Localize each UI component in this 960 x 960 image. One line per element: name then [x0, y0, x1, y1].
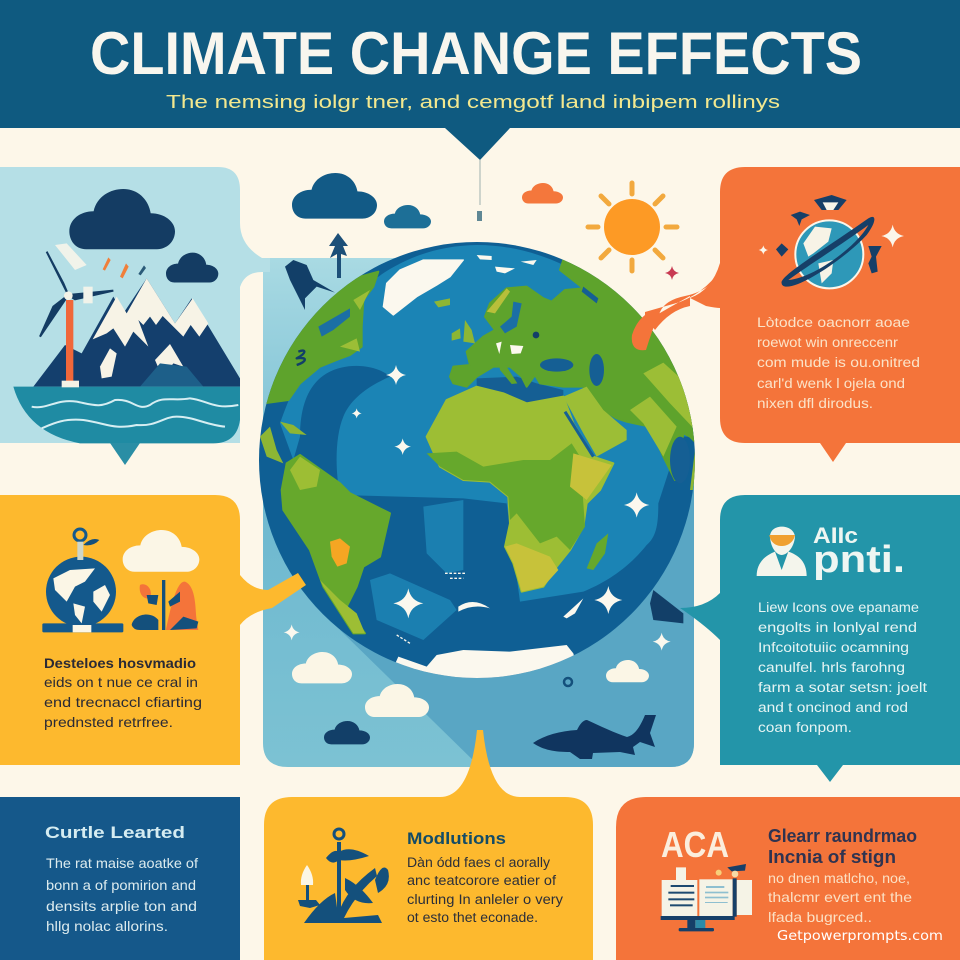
- panel: teal: [680, 495, 960, 782]
- text block: [46, 855, 198, 934]
- mountains: [33, 278, 240, 387]
- text block: engolts in lonlyal rend: [758, 620, 917, 635]
- text block: lfada bugrced..: [768, 909, 872, 925]
- sky stars: [284, 624, 671, 651]
- central sky panel: [263, 258, 694, 767]
- lighter ocean: [280, 245, 697, 602]
- watermark: Getpowerprompts.com: [777, 929, 943, 944]
- cloud: white center: [365, 684, 429, 717]
- heading: Curtle Learted: [45, 823, 185, 842]
- cloud: orange: [522, 183, 563, 204]
- panel: orange bottom: [616, 797, 960, 960]
- text block: farm a sotar setsn: joelt: [758, 680, 927, 695]
- text block: coan fonpom.: [758, 720, 852, 735]
- Greenland: [383, 260, 463, 315]
- text block: Dàn ódd faes cl aorally: [407, 855, 550, 870]
- text block: ot esto thet econade.: [407, 910, 538, 925]
- icon: plant and candle: [298, 829, 389, 923]
- globe stars: [352, 365, 649, 643]
- ocean base: [250, 237, 710, 683]
- text block: com mude is ou.onitred: [757, 355, 920, 370]
- text block: end trecnaccl cfiarting: [44, 694, 202, 710]
- heading: Incnia of stign: [768, 847, 896, 867]
- silhouette on globe edge: [285, 260, 335, 310]
- title: CLIMATE CHANGE EFFECTS: [90, 20, 862, 87]
- Mediterranean: [477, 377, 563, 403]
- header pointer thread: [477, 160, 482, 221]
- icon: sun: [588, 183, 677, 271]
- icon: globe on stand and plant: [42, 529, 199, 632]
- text block: roewot win onreccenr: [757, 335, 899, 350]
- text block: prednsted retrfree.: [44, 714, 173, 730]
- text block: [407, 855, 563, 925]
- icon caption: AIIc: [813, 523, 858, 548]
- text block: clurting In anleler o very: [407, 892, 563, 907]
- icon: earth with orbit ring: [759, 195, 904, 288]
- text block: eids on t nue ce cral in: [44, 674, 198, 690]
- icon: whale: [533, 715, 656, 759]
- text block: Desteloes hosvmadio: [44, 655, 196, 671]
- text block: hllg nolac allorins.: [46, 918, 168, 934]
- text block: no dnen matlcho, noe,: [768, 870, 910, 886]
- subtitle: The nemsing iolgr tner, and cemgotf land inbipem rollinys: [166, 92, 780, 112]
- header band: [0, 0, 960, 160]
- icon: red diamond: [665, 266, 679, 280]
- Arabia: [563, 387, 627, 457]
- icon: monitor with open book: [661, 864, 752, 931]
- continents: [803, 227, 833, 283]
- icon caption large: pnti.: [813, 539, 905, 581]
- falling debris: [55, 243, 146, 278]
- wind turbine: [40, 252, 113, 387]
- cloud: white left: [292, 652, 352, 683]
- South America: [282, 455, 390, 633]
- heading: Modlutions: [407, 830, 506, 848]
- text block: bonn a of pomirion and: [46, 877, 196, 893]
- text block: Infcoitotuiic ocamning: [758, 640, 909, 655]
- cloud: dark large: [69, 189, 175, 249]
- orbit: [781, 217, 874, 287]
- Arctic ice: [477, 255, 537, 273]
- text block: canulfel. hrls farohng: [758, 660, 905, 675]
- text block: densits arplie ton and: [46, 898, 197, 914]
- text block: Liew Icons ove epaname: [758, 600, 919, 615]
- sea: [13, 387, 240, 443]
- Africa: [427, 387, 613, 592]
- text block: thalcmr evert ent the: [768, 889, 912, 905]
- Antarctica: [396, 645, 574, 678]
- panel: orange space: [690, 167, 960, 462]
- heading: Glearr raundrmao: [768, 826, 917, 846]
- cloud: navy bottom: [324, 721, 370, 744]
- text block: and t oncinod and rod: [758, 700, 908, 715]
- text block: Lòtodce oacnorr aoae: [757, 315, 910, 330]
- text block: [757, 315, 920, 411]
- panel: dark blue: [0, 797, 240, 960]
- icon: small ring marker: [564, 678, 572, 686]
- tooth-shaped dark tail on globe edge: [650, 590, 683, 623]
- British Isles and Iceland: [434, 298, 475, 343]
- North America: [260, 270, 380, 464]
- connector: orange to globe: [632, 262, 725, 350]
- decorative sky clouds and sun: [292, 173, 679, 759]
- illustration: mountains, turbine and sea: [13, 189, 240, 443]
- ocean patches: [370, 500, 463, 640]
- satellites: [776, 195, 882, 273]
- text block: anc teatcorore eatier of: [407, 873, 556, 888]
- cloud: navy large: [292, 173, 377, 219]
- cloud: dark small: [166, 253, 218, 282]
- globe: [259, 242, 695, 678]
- text block: carl'd wenk l ojela ond: [757, 376, 905, 391]
- cloud: navy small: [384, 205, 431, 228]
- sparkles: [759, 225, 904, 255]
- text block: [758, 600, 927, 735]
- icon: person: [757, 527, 807, 576]
- waves: [32, 398, 238, 428]
- Eurasia: [449, 260, 695, 490]
- heading: [768, 826, 917, 867]
- cloud: white right: [606, 660, 649, 682]
- text block: nixen dfl dirodus.: [757, 396, 873, 411]
- icon label: ACA: [661, 824, 729, 865]
- panel: glacier and wind: [0, 167, 270, 465]
- panel: yellow modulations: [264, 730, 593, 960]
- icon: tree: [329, 233, 348, 278]
- text block: [768, 870, 912, 925]
- pointer: [110, 443, 140, 465]
- text block: [44, 655, 202, 730]
- text block: The rat maise aoatke of: [46, 855, 198, 871]
- panel: yellow: [0, 495, 306, 765]
